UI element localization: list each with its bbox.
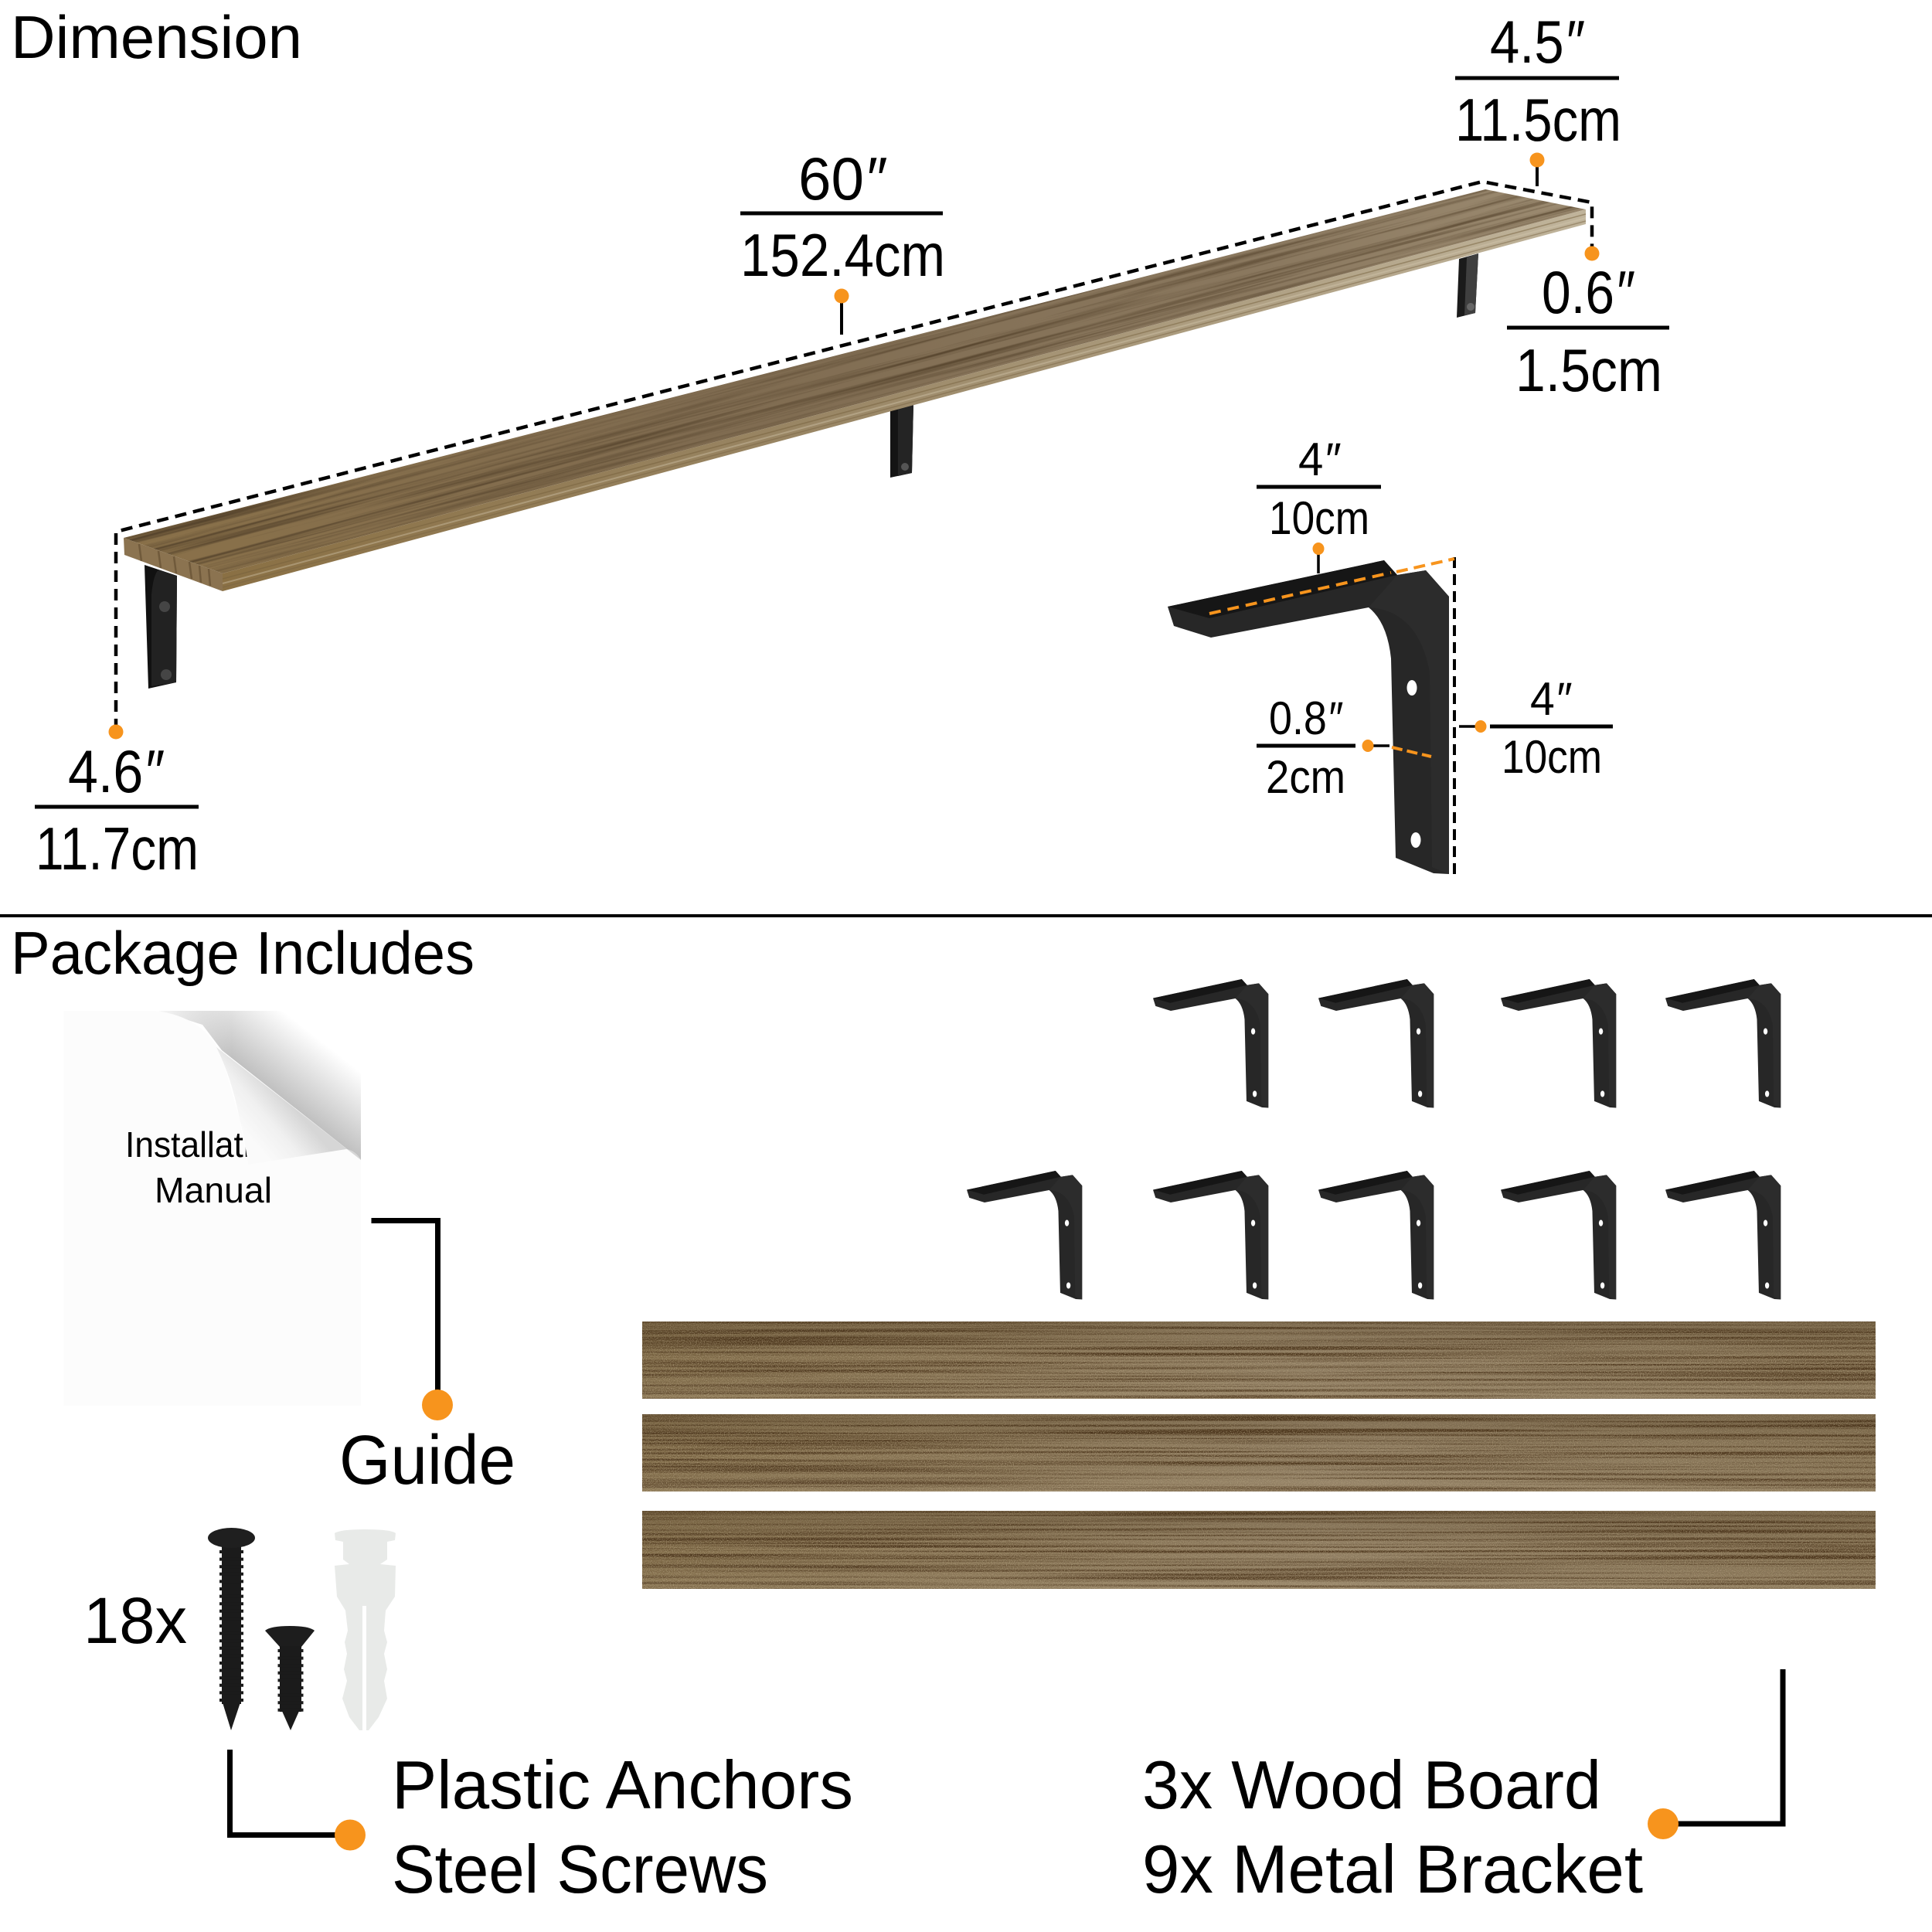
dimension: shelf width 4.5: 4.5″ xyxy=(1490,8,1584,76)
manual page shadow xyxy=(158,1011,361,1160)
shelf left end xyxy=(124,538,223,591)
icon: long black screw xyxy=(208,1528,255,1730)
label: Plastic Anchors, Steel Screws: Plastic Anchors xyxy=(392,1747,853,1823)
bracket dimension diagram xyxy=(1168,434,1613,874)
bracket 2 top row xyxy=(1318,979,1434,1107)
label: 3x Wood Board, 9x Metal Bracket: 3x Wood Board xyxy=(1142,1747,1601,1823)
label: Plastic Anchors, Steel Screws: Steel Screws xyxy=(392,1831,768,1907)
shelf brackets xyxy=(145,253,1478,689)
dimension: bracket arm 4 inch xyxy=(1257,434,1381,573)
icon: right shelf bracket xyxy=(1457,253,1478,318)
quantity: 18x: 18x xyxy=(83,1584,187,1657)
icon: large metal bracket xyxy=(1168,560,1449,874)
dimension: bracket height 4 inch: 10cm xyxy=(1502,731,1602,783)
bracket dashed guides xyxy=(1209,557,1454,874)
icon: left shelf bracket xyxy=(145,565,177,689)
dashed outline of shelf xyxy=(116,182,1592,730)
bracket 9 bottom row xyxy=(1665,1171,1781,1299)
dimension: shelf height 4.6 xyxy=(35,725,199,883)
dimension: bracket width 0.8 inch: 0.8″ xyxy=(1269,692,1343,744)
dimension: shelf height 4.6: 4.6″ xyxy=(68,737,164,805)
icon: middle shelf bracket xyxy=(890,405,913,478)
dimension: shelf length 60: 60″ xyxy=(798,145,886,213)
bracket 1 top row xyxy=(1153,979,1268,1107)
icon: short black screw xyxy=(265,1626,315,1730)
wood board 3 xyxy=(642,1511,1876,1589)
dimension: shelf height 4.6: 11.7cm xyxy=(36,815,199,883)
bracket 5 bottom row xyxy=(967,1171,1082,1299)
shelf front edge xyxy=(223,209,1586,591)
heading: Package Includes: Package Includes xyxy=(11,919,474,987)
label: Guide: Guide xyxy=(339,1422,515,1499)
label: 3x Wood Board, 9x Metal Bracket: 9x Metal Bracket xyxy=(1142,1831,1643,1907)
dimension: shelf width 4.5: 11.5cm xyxy=(1455,86,1621,154)
small brackets xyxy=(967,979,1781,1299)
bracket 6 bottom row xyxy=(1153,1171,1268,1299)
dimension: shelf thickness 0.6: 1.5cm xyxy=(1515,336,1662,404)
manual page xyxy=(63,1011,361,1406)
bracket 8 bottom row xyxy=(1501,1171,1616,1299)
dimension: bracket width 0.8 inch xyxy=(1257,692,1389,803)
bracket 4 top row xyxy=(1665,979,1781,1107)
dimension: bracket arm 4 inch: 10cm xyxy=(1269,492,1369,544)
icon: plastic anchor xyxy=(335,1529,396,1730)
dimension: bracket height 4 inch: 4″ xyxy=(1530,673,1572,725)
connector: Guide xyxy=(371,1221,453,1420)
bracket 7 bottom row xyxy=(1318,1171,1434,1299)
wood board 2 xyxy=(642,1414,1876,1492)
connector: anchors and screws xyxy=(230,1750,366,1850)
label: 3x Wood Board, 9x Metal Bracket xyxy=(1142,1747,1643,1907)
dimension: shelf thickness 0.6 xyxy=(1507,246,1669,404)
wood boards xyxy=(642,1321,1876,1589)
dimension: shelf width 4.5 xyxy=(1455,8,1621,186)
section divider xyxy=(0,914,1932,917)
manual page curl xyxy=(216,1047,361,1165)
dimension: bracket arm 4 inch: 4″ xyxy=(1298,434,1341,485)
dimension: bracket width 0.8 inch: 2cm xyxy=(1266,751,1345,803)
manual shadow fade xyxy=(158,1011,232,1057)
wood board 1 xyxy=(642,1321,1876,1399)
dimension: bracket height 4 inch xyxy=(1459,673,1613,783)
label: Plastic Anchors, Steel Screws xyxy=(392,1747,853,1907)
manual text second line: Manual xyxy=(155,1170,272,1210)
dimension: shelf length 60: 152.4cm xyxy=(740,221,945,289)
connector: boards and brackets xyxy=(1648,1669,1783,1839)
manual text: Installation xyxy=(125,1124,289,1165)
heading: Dimension: Dimension xyxy=(11,3,302,71)
dimension: shelf thickness 0.6: 0.6″ xyxy=(1542,258,1634,326)
dimension: shelf length 60 xyxy=(740,145,945,335)
wood shelf xyxy=(124,189,1586,591)
installation manual xyxy=(63,1011,361,1406)
bracket 3 top row xyxy=(1501,979,1616,1107)
shelf top face xyxy=(124,189,1586,573)
